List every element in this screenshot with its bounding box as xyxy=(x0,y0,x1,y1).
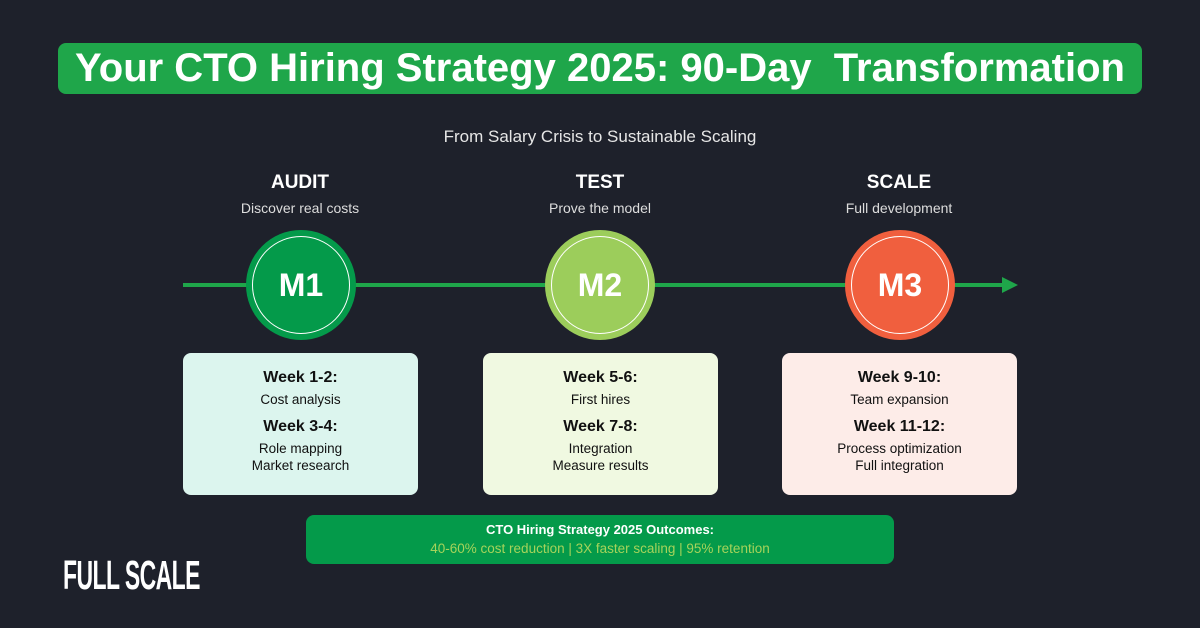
card: month 2: First hires xyxy=(571,392,630,407)
card: month 2: Measure results xyxy=(552,458,649,473)
milestone M3: M3 xyxy=(878,267,922,303)
card: month 2 xyxy=(483,353,718,495)
card: month 2: Week 7-8: xyxy=(563,418,638,435)
milestone M2 xyxy=(545,230,655,340)
outcomes banner xyxy=(306,515,894,564)
phase heading: audit: AUDIT xyxy=(271,172,329,193)
phase heading: scale xyxy=(846,172,952,216)
phase heading: audit xyxy=(241,172,359,216)
card: month 1: Market research xyxy=(252,458,349,473)
card: month 2: Integration xyxy=(569,441,632,456)
phase heading: scale: SCALE xyxy=(867,172,931,193)
milestone M1 xyxy=(246,230,356,340)
card: month 3: Team expansion xyxy=(850,392,949,407)
card: month 1: Role mapping xyxy=(259,441,342,456)
milestone M2: M2 xyxy=(578,267,622,303)
outcomes banner: CTO Hiring Strategy 2025 Outcomes: xyxy=(486,522,714,537)
milestone M1: M1 xyxy=(279,267,323,303)
card: month 1: Week 1-2: xyxy=(263,369,338,386)
milestone M3 xyxy=(845,230,955,340)
card: month 3: Full integration xyxy=(855,458,944,473)
phase heading: audit: Discover real costs xyxy=(241,200,359,216)
card: month 3: Process optimization xyxy=(837,441,962,456)
card: month 3 xyxy=(782,353,1017,495)
card: month 1: Cost analysis xyxy=(260,392,341,407)
title: Your CTO Hiring Strategy 2025: 90-Day Transformation xyxy=(75,46,1125,90)
phase heading: test xyxy=(549,172,651,216)
card: month 1: Week 3-4: xyxy=(263,418,338,435)
phase heading: test: TEST xyxy=(576,172,624,193)
card: month 1 xyxy=(183,353,418,495)
logo: FULL SCALE xyxy=(63,552,200,598)
outcomes banner: 40-60% cost reduction | 3X faster scaling | 95% retention xyxy=(430,541,770,556)
card: month 2: Week 5-6: xyxy=(563,369,638,386)
timeline arrow xyxy=(183,277,1018,293)
phase heading: test: Prove the model xyxy=(549,200,651,216)
subtitle: From Salary Crisis to Sustainable Scaling xyxy=(444,127,756,146)
card: month 3: Week 9-10: xyxy=(858,369,941,386)
phase heading: scale: Full development xyxy=(846,200,952,216)
card: month 3: Week 11-12: xyxy=(854,418,945,435)
